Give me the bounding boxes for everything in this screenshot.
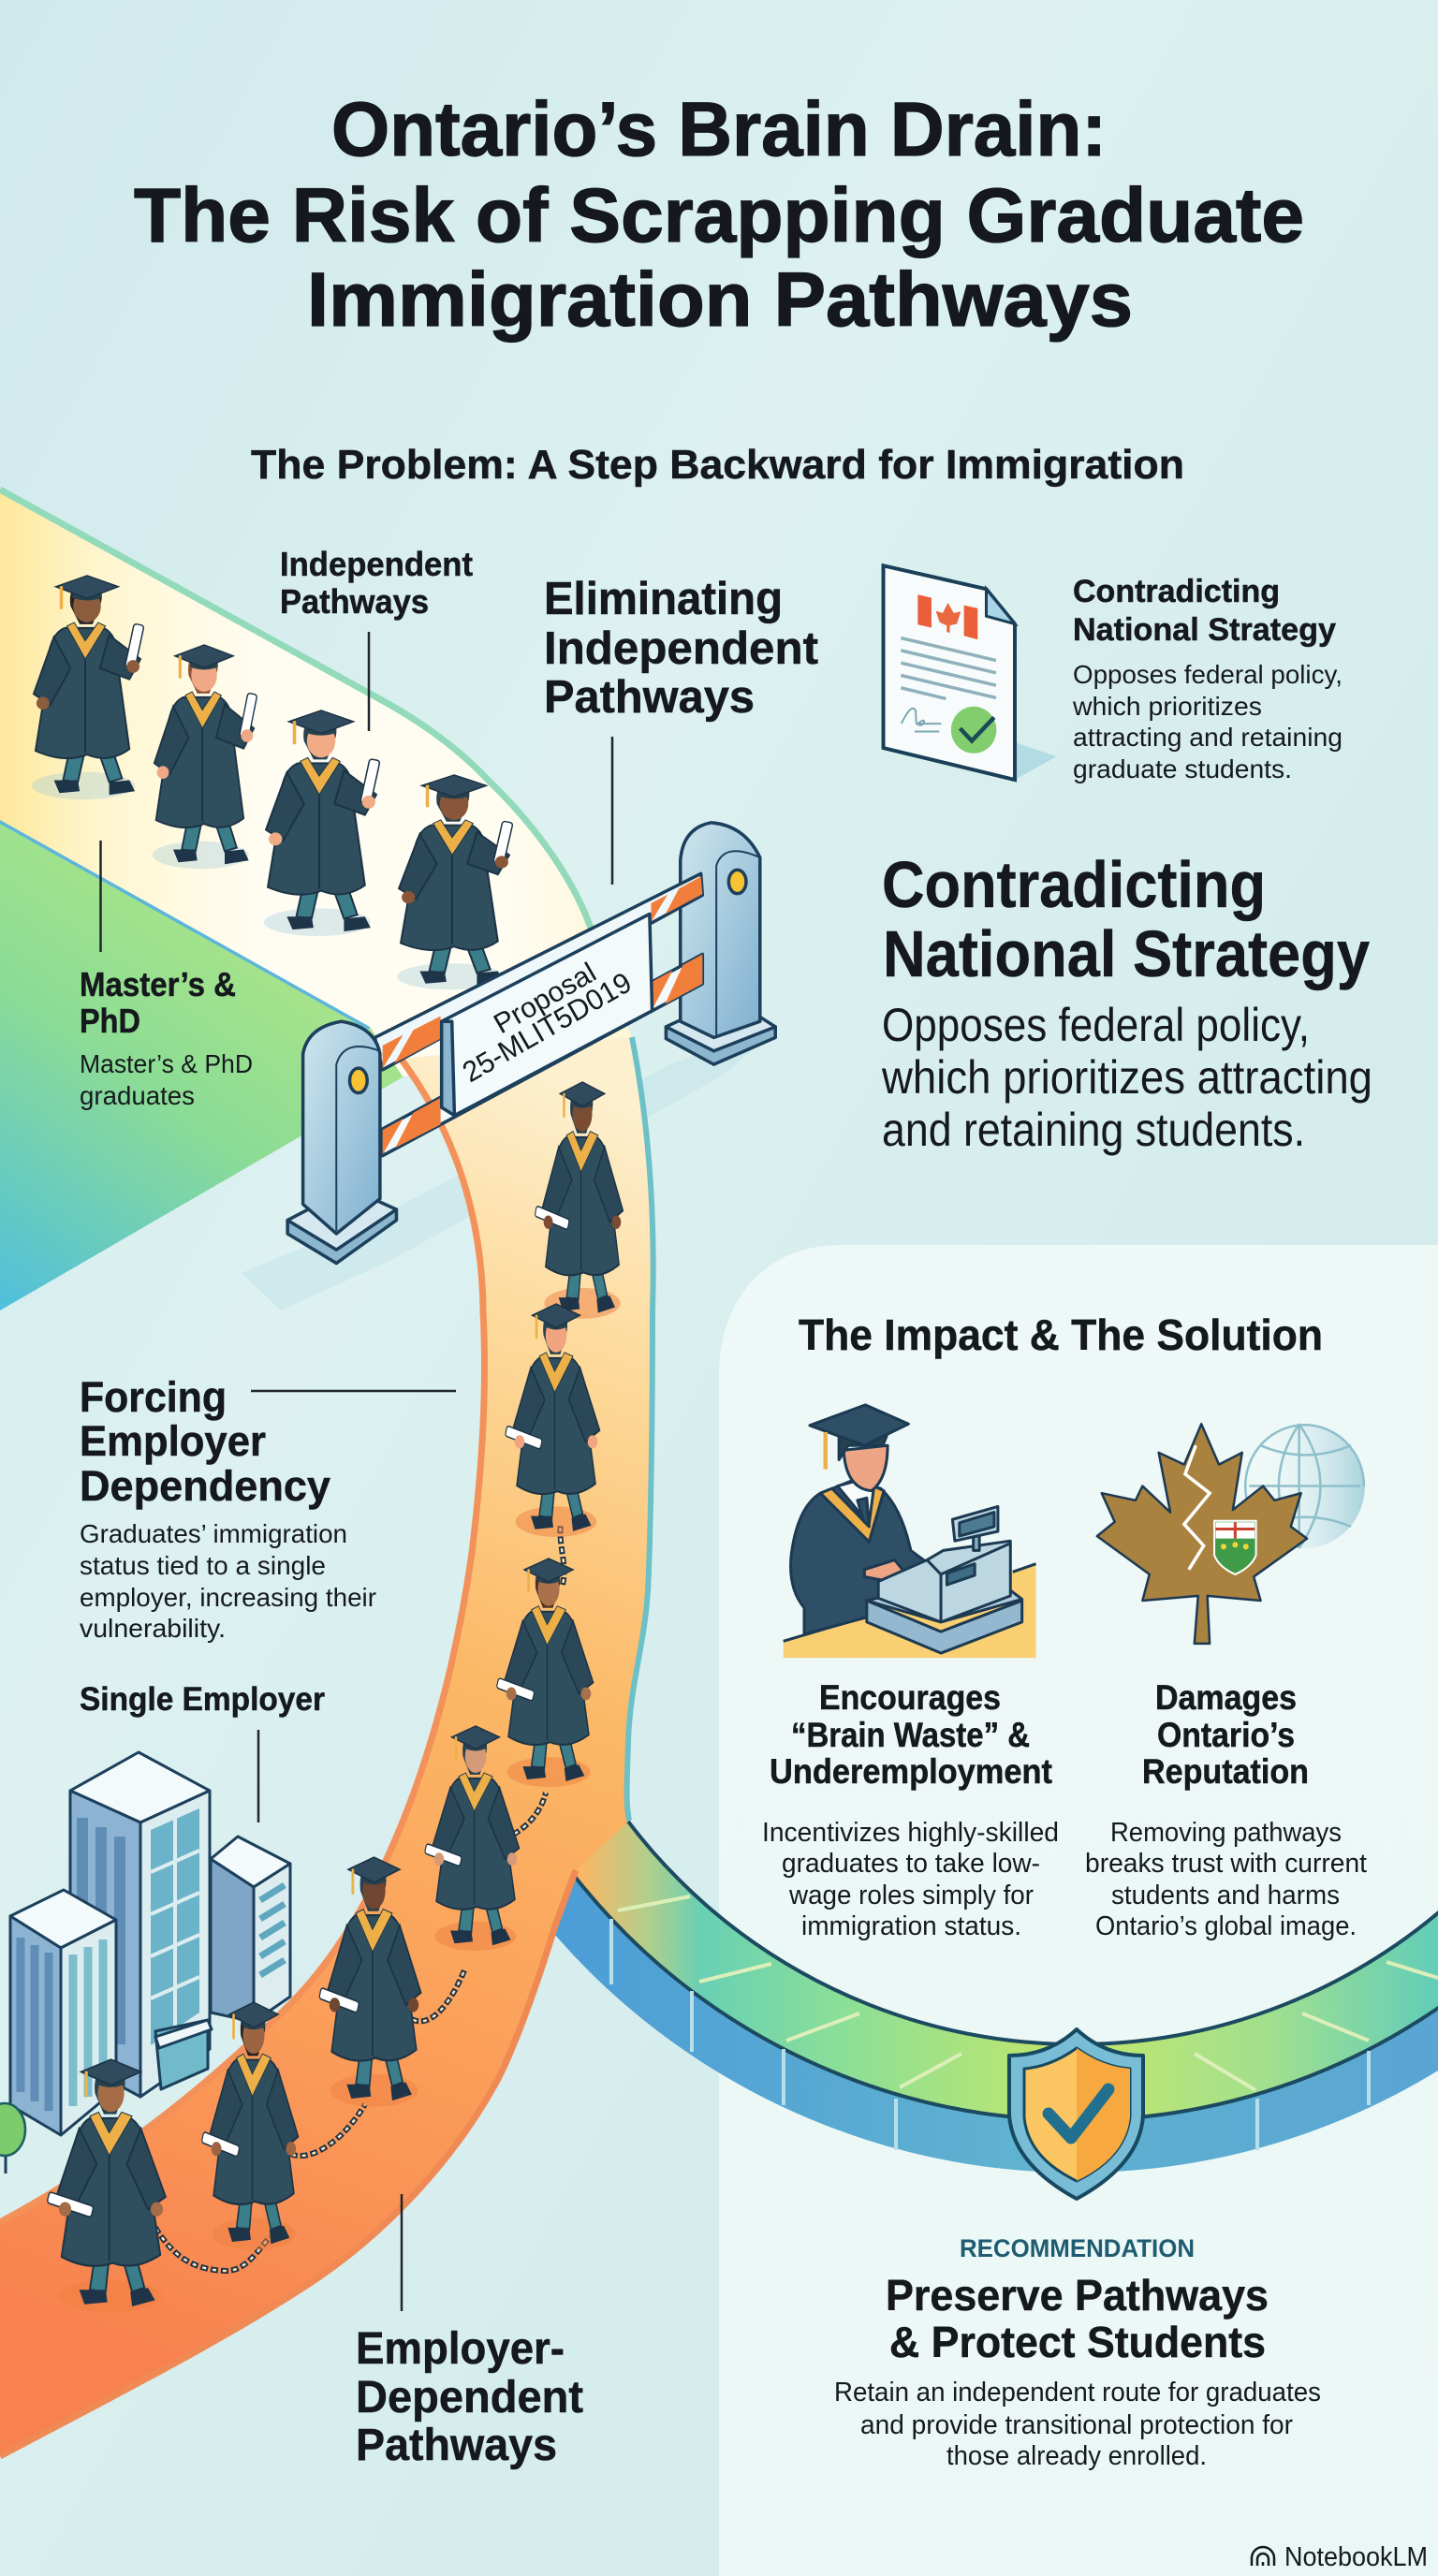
label: employer-dependent pathways: Pathways <box>356 2421 557 2470</box>
label: eliminating independent pathways <box>544 574 818 723</box>
title: Immigration Pathways <box>307 257 1133 343</box>
text: forcing employer dependency: Dependency <box>80 1462 330 1510</box>
text: damages reputation: students and harms <box>1111 1881 1340 1910</box>
text: brain waste: Underemployment <box>770 1752 1052 1791</box>
graduate 9 <box>319 1857 421 2107</box>
label: single employer: Single Employer <box>80 1681 325 1718</box>
entrance <box>155 2020 208 2089</box>
label: masters and phd: Master’s & PhD <box>80 1049 253 1078</box>
recommendation: RECOMMENDATION <box>960 2234 1195 2262</box>
ring ticks <box>611 1896 1438 2150</box>
text: damages reputation: Reputation <box>1142 1752 1309 1791</box>
heading: the problem: The Problem: A Step Backward for Immigration <box>251 442 1184 488</box>
label: eliminating independent pathways: Pathways <box>544 672 755 723</box>
employer-dependent pathway <box>0 1037 653 2456</box>
title <box>134 87 1304 343</box>
graduate 1 <box>32 576 144 799</box>
graduate 3 <box>264 710 380 936</box>
large text: contradicting national strategy: National Strategy <box>883 917 1370 990</box>
text: forcing employer dependency: status tied to a single <box>80 1551 326 1580</box>
large text: contradicting national strategy <box>881 848 1372 1156</box>
icon: shield <box>1009 2029 1143 2199</box>
proposal sign text: Proposal <box>489 957 601 1040</box>
proposal sign text: 25-MLIT5D019 <box>457 966 637 1089</box>
small text: contradicting national strategy: Contradicting <box>1073 574 1280 609</box>
gate <box>287 823 775 1264</box>
graduate 2 <box>153 645 257 869</box>
independent pathway band <box>0 490 632 1310</box>
text: damages reputation: Removing pathways <box>1110 1818 1342 1848</box>
small text: contradicting national strategy: Opposes federal policy, <box>1073 660 1343 689</box>
label: masters and phd: PhD <box>80 1002 140 1040</box>
left post <box>287 1021 396 1264</box>
recommendation <box>834 2234 1321 2471</box>
lower rail <box>383 954 702 1156</box>
icon: graduate at cash register <box>784 1405 1035 1658</box>
text: forcing employer dependency: Employer <box>80 1417 266 1465</box>
panel: impact and solution <box>719 1245 1438 2576</box>
label: eliminating independent pathways: Eliminating <box>544 574 783 624</box>
small text: contradicting national strategy: which prioritizes <box>1072 692 1262 721</box>
right building <box>211 1837 290 1887</box>
graduate 11 <box>47 2059 166 2313</box>
ring outer blue <box>556 1880 1438 2172</box>
title: The Risk of Scrapping Graduate <box>134 173 1304 258</box>
recommendation: Retain an independent route for graduates <box>834 2378 1321 2408</box>
label: masters and phd: graduates <box>80 1081 195 1110</box>
label: employer-dependent pathways: Dependent <box>356 2373 583 2422</box>
recommendation: & Protect Students <box>889 2318 1266 2366</box>
upper rail <box>374 873 702 1070</box>
small text: contradicting national strategy: National Strategy <box>1073 612 1336 648</box>
graduate 6 <box>506 1304 599 1537</box>
right post <box>666 823 775 1064</box>
icon: tree <box>0 2103 25 2174</box>
text: brain waste: Encourages <box>819 1678 1001 1717</box>
graduate 10 <box>201 2002 299 2250</box>
large text: contradicting national strategy: and retaining students. <box>882 1104 1305 1156</box>
graduates on independent path <box>32 576 513 989</box>
label: masters and phd: Master’s & <box>80 965 236 1003</box>
label: employer-dependent pathways: Employer- <box>356 2324 565 2374</box>
recommendation: Preserve Pathways <box>886 2271 1269 2320</box>
graduates on employer path <box>47 1082 623 2313</box>
small text: contradicting national strategy: graduate students. <box>1073 754 1292 783</box>
text: damages reputation: breaks trust with current <box>1085 1849 1367 1879</box>
text: brain waste: graduates to take low- <box>782 1849 1040 1879</box>
label: independent pathways <box>280 545 473 621</box>
text: damages reputation <box>1085 1678 1367 1941</box>
graduate 7 <box>496 1559 594 1787</box>
text: brain waste: Incentivizes highly-skilled <box>762 1818 1059 1848</box>
text: forcing employer dependency: Forcing <box>80 1373 227 1421</box>
ring: protected arc <box>556 1821 1438 2172</box>
cream walkway <box>0 490 632 1076</box>
main tower <box>70 1752 210 1822</box>
ring inner green <box>576 1823 1438 2115</box>
label: eliminating independent pathways: Independent <box>544 623 818 674</box>
chains <box>150 1524 564 2271</box>
gate ground shadow <box>242 1030 777 1310</box>
small text: contradicting national strategy <box>1072 574 1343 783</box>
ring edges <box>575 1821 1438 2119</box>
heading: impact and solution: The Impact & The Solution <box>799 1310 1323 1359</box>
text: forcing employer dependency: Graduates’ immigration <box>80 1519 347 1548</box>
label: independent pathways: Independent <box>280 545 473 583</box>
title: Ontario’s Brain Drain: <box>331 87 1107 172</box>
text: brain waste: immigration status. <box>801 1911 1021 1941</box>
text: forcing employer dependency: vulnerability. <box>80 1614 226 1643</box>
text: brain waste: “Brain Waste” & <box>791 1716 1030 1754</box>
graduate 5 <box>535 1082 623 1319</box>
icon: policy document <box>884 565 1057 780</box>
graduate 8 <box>425 1726 519 1951</box>
text: forcing employer dependency: employer, increasing their <box>80 1583 376 1612</box>
recommendation: those already enrolled. <box>946 2441 1207 2471</box>
label: independent pathways: Pathways <box>280 582 429 621</box>
leader lines <box>101 632 612 2311</box>
text: brain waste: wage roles simply for <box>788 1881 1034 1910</box>
label: masters and phd <box>80 965 253 1110</box>
green field <box>0 820 412 1310</box>
proposal sign <box>442 914 653 1116</box>
large text: contradicting national strategy: Contradicting <box>882 848 1266 921</box>
text: forcing employer dependency <box>80 1373 376 1643</box>
small text: contradicting national strategy: attracting and retaining <box>1073 723 1343 752</box>
text: damages reputation: Ontario’s <box>1157 1716 1295 1754</box>
left building <box>10 1890 116 1948</box>
buildings: single employer <box>10 1752 290 2135</box>
text: damages reputation: Ontario’s global image. <box>1095 1911 1357 1941</box>
text: damages reputation: Damages <box>1155 1678 1297 1717</box>
NotebookLM logo: NotebookLM <box>1284 2542 1428 2572</box>
label: employer-dependent pathways <box>356 2324 583 2470</box>
large text: contradicting national strategy: which prioritizes attracting <box>881 1051 1372 1104</box>
icon: cracked maple leaf with globe <box>1097 1424 1365 1644</box>
large text: contradicting national strategy: Opposes federal policy, <box>882 999 1310 1051</box>
recommendation: and provide transitional protection for <box>860 2410 1293 2440</box>
text: brain waste <box>762 1678 1059 1941</box>
graduate 4 <box>397 775 513 989</box>
